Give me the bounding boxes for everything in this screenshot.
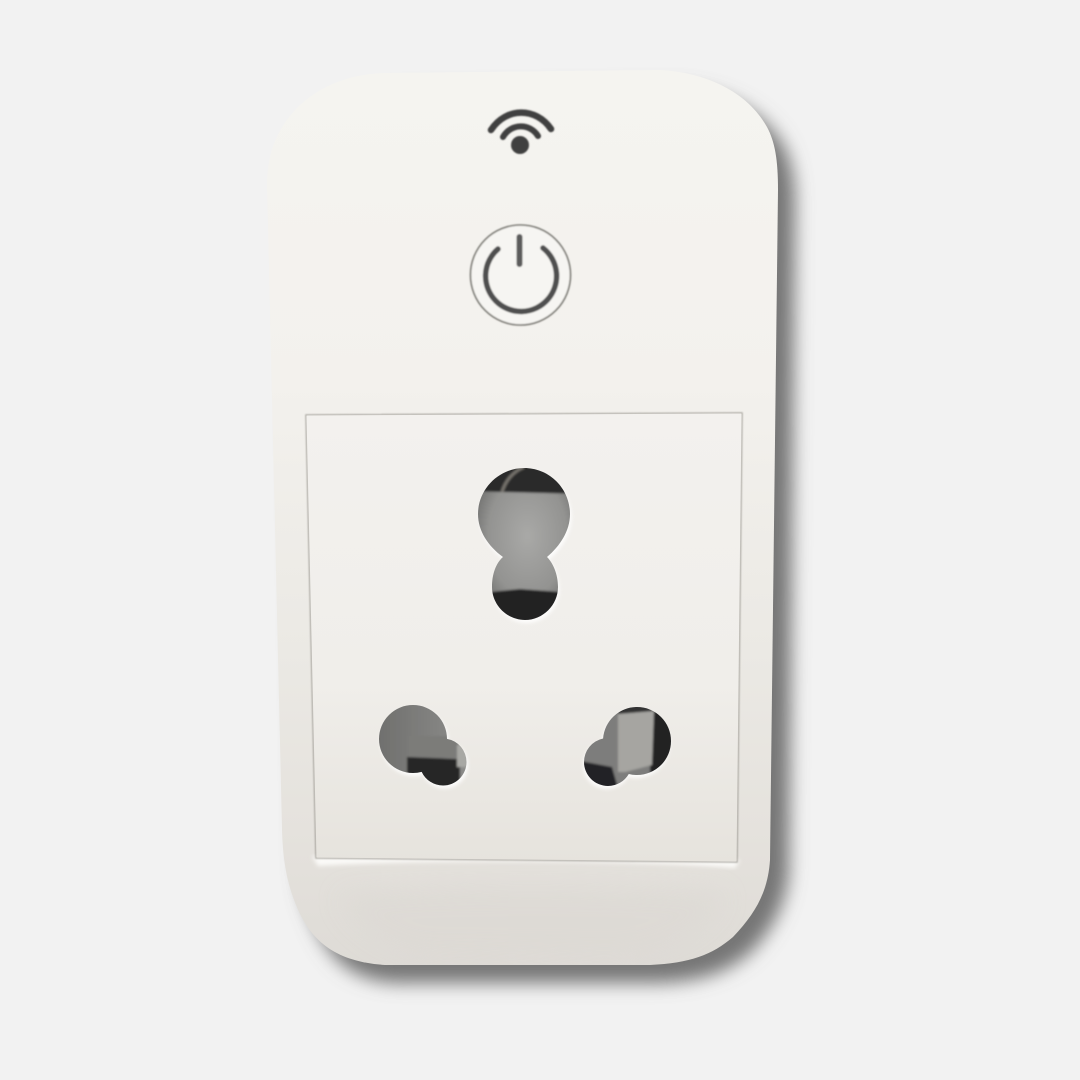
socket plate [306, 413, 742, 862]
socket hole: lower left pin [379, 705, 468, 789]
socket hole: lower right pin [582, 707, 671, 790]
illustration: smart wifi socket [274, 81, 808, 996]
device body [267, 70, 778, 965]
socket hole: top earth pin [478, 468, 572, 623]
button: power [470, 225, 570, 325]
drop shadow [290, 88, 795, 983]
icon: wifi signal [491, 113, 551, 154]
